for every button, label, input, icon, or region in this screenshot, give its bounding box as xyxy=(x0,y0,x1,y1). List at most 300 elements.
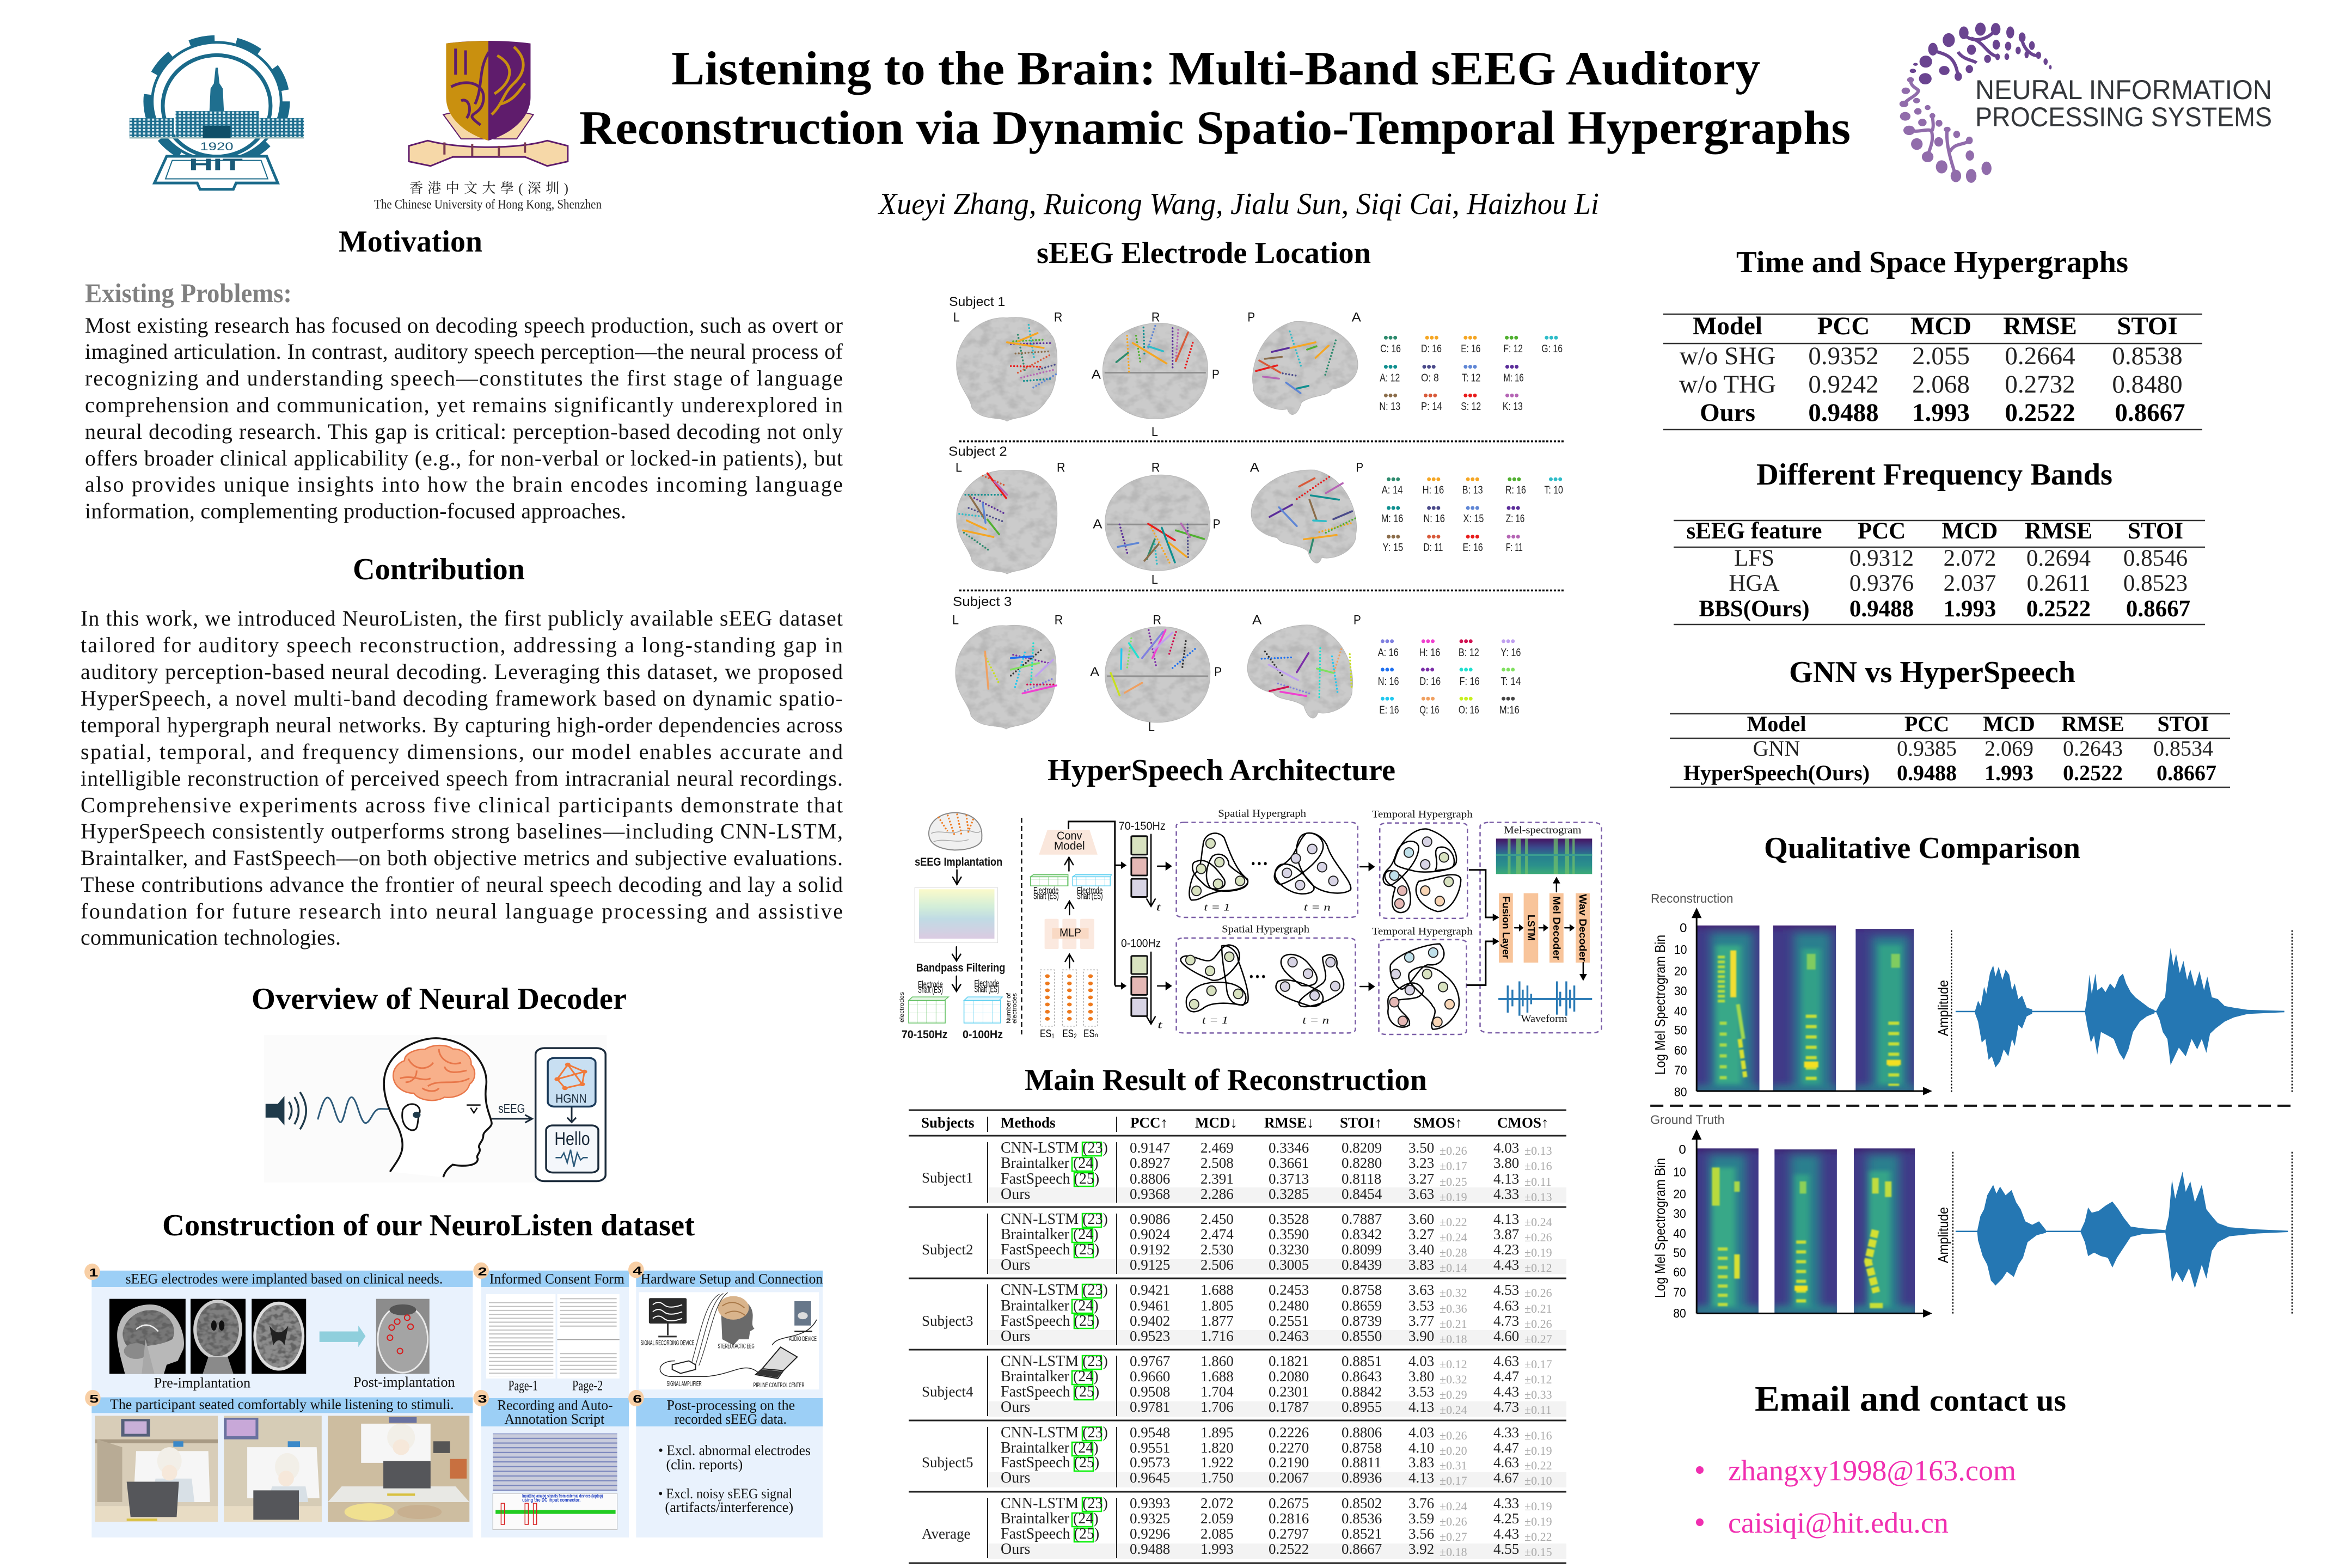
arrows xyxy=(1515,877,1587,981)
table: GNN vs HyperSpeech: STOI xyxy=(2158,712,2209,736)
legend: D: 16 xyxy=(1421,342,1442,355)
time axes: t xyxy=(1157,1019,1162,1031)
table: frequency bands xyxy=(1674,518,2205,624)
rows: Subject2: ±0.22 xyxy=(1440,1215,1467,1229)
rows: Subject1: ±0.16 xyxy=(1524,1159,1552,1173)
table: frequency bands: STOI xyxy=(2128,518,2183,544)
logo: The Chinese University of Hong Kong Shenzhen: 香港中文大學(深圳) xyxy=(409,181,568,196)
legend: Y: 15 xyxy=(1382,541,1403,554)
table header: Subjects xyxy=(921,1114,975,1131)
rows: Subject2: 3.40 xyxy=(1408,1241,1434,1258)
rows: Subject4: 0.2080 xyxy=(1269,1368,1309,1385)
text block: motivation body: also provides unique insights into how the brain encodes incoming language xyxy=(85,472,843,497)
rows: Average: 0.8502 xyxy=(1342,1495,1382,1511)
rows: Subject4: 0.9767 xyxy=(1130,1353,1170,1369)
table: GNN vs HyperSpeech: HyperSpeech(Ours) xyxy=(1683,761,1870,785)
panel: subject 2: Subject 2 xyxy=(948,444,1007,459)
label: sEEG arrow xyxy=(492,1101,532,1123)
rows: Subject5: FastSpeech (25) xyxy=(1001,1454,1099,1471)
rows: Average: ±0.19 xyxy=(1524,1499,1552,1513)
Hello block xyxy=(546,1125,598,1173)
rows: Average: 2.059 xyxy=(1200,1510,1234,1527)
rows: Average: 4.33 xyxy=(1493,1495,1519,1511)
panel: post-processing: Post-processing on the xyxy=(666,1398,795,1413)
icon: ear xyxy=(402,1104,420,1130)
figure: HyperSpeech architecture: Temporal Hypergraph xyxy=(1372,808,1473,820)
labels: rotated axis titles xyxy=(1652,935,1951,1298)
annotation trace: Inputting analog signals from external devices (laptop) xyxy=(522,1493,603,1499)
orientation labels: R xyxy=(1054,310,1062,324)
panel: recording script: Recording and Auto- xyxy=(497,1398,613,1413)
logo: The Chinese University of Hong Kong Shenzhen xyxy=(374,41,602,212)
rows: Subject5: ±0.19 xyxy=(1524,1444,1552,1457)
rows: Subject1: ±0.25 xyxy=(1440,1175,1467,1189)
panel: subject 3: Subject 3 xyxy=(953,595,1012,609)
rows: Subject2: 0.3590 xyxy=(1269,1226,1309,1242)
text block: contribution body: foundation for future research into neural language processing and assistive xyxy=(81,899,843,923)
rows: Subject1: Ours xyxy=(1001,1186,1030,1203)
table: time and space hypergraphs: 0.8667 xyxy=(2115,399,2185,427)
panel: hardware setup: SIGNAL RECORDING DEVICE xyxy=(641,1339,694,1346)
rows: Subject4: 1.704 xyxy=(1200,1383,1234,1400)
rows: Subject2: 0.9024 xyxy=(1130,1226,1171,1242)
rows: Subject2: ±0.12 xyxy=(1524,1261,1552,1275)
panel: post-processing: • Excl. abnormal electrodes xyxy=(658,1443,811,1458)
legend: C: 16 xyxy=(1380,342,1401,355)
rows: Average: ±0.22 xyxy=(1524,1530,1552,1543)
table: frequency bands: HGA xyxy=(1729,571,1780,596)
rows: Subject4: ±0.32 xyxy=(1440,1373,1467,1386)
icon: speaker xyxy=(266,1092,306,1129)
amplifier xyxy=(672,1361,696,1374)
legend: B: 13 xyxy=(1462,483,1483,496)
legend: T: 14 xyxy=(1500,675,1521,688)
spectrograms xyxy=(1690,1145,1920,1315)
table: time and space hypergraphs: w/o SHG xyxy=(1680,342,1775,370)
table: frequency bands: RMSE xyxy=(2025,518,2092,544)
text block: contribution body: tailored for auditory speech reconstruction, addressing a long-standing gap in xyxy=(81,633,843,657)
table: time and space hypergraphs: 0.2732 xyxy=(2005,370,2075,399)
rows: Subject2: 0.3005 xyxy=(1269,1257,1309,1273)
rows: Subject3: 3.90 xyxy=(1408,1328,1434,1344)
rows: Subject1: 0.3346 xyxy=(1269,1140,1309,1156)
rows: Subject5: ±0.22 xyxy=(1524,1459,1552,1472)
rows: Subject3: ±0.36 xyxy=(1440,1302,1467,1315)
brain view: top xyxy=(1105,475,1210,571)
rows: Subject2: 3.87 xyxy=(1493,1226,1519,1242)
rows: Subject3: ±0.26 xyxy=(1524,1286,1552,1300)
rows: Subject5: 4.33 xyxy=(1493,1424,1519,1441)
rows: Subject3: 0.8739 xyxy=(1342,1313,1382,1329)
orientation labels: L xyxy=(1152,572,1158,587)
decoder output: Waveform xyxy=(1521,1013,1567,1025)
orientation labels: L xyxy=(953,310,960,324)
table: frequency bands: MCD xyxy=(1942,518,1998,544)
table: time and space hypergraphs: 0.9352 xyxy=(1808,342,1879,370)
table: frequency bands: 0.8546 xyxy=(2123,546,2188,571)
logo: Harbin Institute of Technology xyxy=(130,40,304,189)
Conv model xyxy=(1039,829,1098,855)
electrode shaft grids xyxy=(1031,875,1112,901)
table: frequency bands: 0.2522 xyxy=(2026,596,2091,622)
rows: Average: 0.9296 xyxy=(1130,1526,1170,1542)
axis ticks: 0 xyxy=(1679,1142,1686,1156)
axis ticks: 70 xyxy=(1673,1285,1686,1300)
legend: N: 16 xyxy=(1378,675,1399,688)
table: frequency bands: PCC xyxy=(1858,518,1906,544)
legend: T: 10 xyxy=(1544,483,1563,496)
legend: B: 12 xyxy=(1459,646,1479,659)
step number badges: 6 xyxy=(633,1392,642,1406)
table: time and space hypergraphs: 0.8538 xyxy=(2112,342,2183,370)
rows: Average: 4.55 xyxy=(1493,1541,1519,1557)
table rules xyxy=(909,1110,1566,1563)
rows: Subject1: 0.9147 xyxy=(1130,1140,1170,1156)
table: GNN vs HyperSpeech: 0.9385 xyxy=(1897,736,1957,761)
orientation labels xyxy=(955,460,1363,587)
signal heatmap xyxy=(915,887,998,943)
rows: Subject2: 4.43 xyxy=(1493,1257,1519,1273)
rows: Average: 4.25 xyxy=(1493,1510,1519,1527)
annotation trace: using the DC input connector. xyxy=(522,1498,580,1503)
table: time and space hypergraphs: 0.9242 xyxy=(1808,370,1879,399)
hypergraph: spatial high band t=1: t = 1 xyxy=(1204,902,1230,913)
rows: Subject4 xyxy=(922,1353,1552,1417)
text block: contribution body: Braintalker, and FastSpeech—on both objective metrics and subjective evaluations. xyxy=(81,846,843,870)
rows: Subject1: 0.8209 xyxy=(1342,1140,1382,1156)
step number badges: 2 xyxy=(478,1265,487,1278)
brain view: top xyxy=(1105,627,1210,722)
rows: Subject1: 2.391 xyxy=(1200,1171,1234,1187)
time axes xyxy=(1147,835,1375,1031)
figure: HyperSpeech architecture: Shaft (ES) xyxy=(1077,891,1102,901)
table header: PCC↑ xyxy=(1130,1114,1168,1131)
orientation labels: A xyxy=(1352,310,1361,324)
photo 1 xyxy=(95,1416,218,1522)
rows: Subject5: 1.895 xyxy=(1200,1424,1234,1441)
rows: Subject1: ±0.17 xyxy=(1440,1159,1467,1173)
hypergraph: spatial high band t=n xyxy=(1275,833,1351,913)
rows: Subject4: ±0.12 xyxy=(1524,1373,1552,1386)
heading: Email and contact us: Email and contact us xyxy=(1755,1379,2066,1419)
panel: subject 1 xyxy=(949,295,1563,439)
rows: Subject2: 2.530 xyxy=(1200,1241,1234,1258)
rows: Subject4: 0.9781 xyxy=(1130,1399,1170,1415)
rows: Subject2: 3.27 xyxy=(1408,1226,1434,1242)
step number badges: 5 xyxy=(89,1392,99,1406)
rows: Subject5: 1.750 xyxy=(1200,1469,1234,1486)
rows: Subject3: 3.77 xyxy=(1408,1313,1434,1329)
axes xyxy=(1692,1129,1932,1318)
axis ticks: 30 xyxy=(1673,1206,1686,1221)
figure: HyperSpeech architecture xyxy=(902,807,1602,1041)
legend: F: 12 xyxy=(1504,342,1523,355)
table: GNN vs HyperSpeech: 0.8534 xyxy=(2153,736,2213,761)
panel: hardware setup xyxy=(636,1271,823,1398)
rows: Subject5: CNN-LSTM (23) xyxy=(1001,1424,1108,1441)
axis ticks: 80 xyxy=(1673,1306,1686,1320)
rows: Subject1: 3.50 xyxy=(1408,1140,1434,1156)
photo 2 xyxy=(224,1416,322,1522)
rows: Subject1: 2.469 xyxy=(1200,1140,1234,1156)
panel: informed consent: Page-1 xyxy=(509,1378,538,1393)
panel: post-processing: (artifacts/interference) xyxy=(665,1499,793,1515)
table: main results xyxy=(909,1110,1566,1563)
hypergraph: temporal high band xyxy=(1383,829,1461,912)
text block: contribution body: intelligible reconstruction of perceived speech from intracranial neural recordings. xyxy=(81,766,843,791)
rows: Subject1: Subject1 xyxy=(922,1169,973,1186)
waveform xyxy=(1498,981,1592,1016)
rows: Subject3: 4.60 xyxy=(1493,1328,1519,1344)
figure: HyperSpeech architecture: Electrode xyxy=(974,978,999,989)
rows: Subject1: FastSpeech (25) xyxy=(1001,1171,1099,1187)
table: GNN vs HyperSpeech: 0.2643 xyxy=(2063,736,2123,761)
rows: Subject5: Ours xyxy=(1001,1469,1030,1486)
rows: Subject4: 4.47 xyxy=(1493,1368,1519,1385)
rows: Subject5: Braintalker (24) xyxy=(1001,1440,1099,1456)
rows: Subject2: Subject2 xyxy=(922,1241,973,1258)
orientation labels: P xyxy=(1356,460,1363,475)
rows: Subject2: 0.9125 xyxy=(1130,1257,1170,1273)
rows: Subject4: 1.706 xyxy=(1200,1399,1234,1415)
text block: contribution body xyxy=(81,606,843,950)
feature stacks xyxy=(1131,836,1147,1016)
table header: Methods xyxy=(1001,1114,1055,1131)
labels: rotated block names: Fusion Layer xyxy=(1500,896,1511,959)
rows: Average: 3.92 xyxy=(1408,1541,1434,1557)
decoder output: Mel-spectrogram xyxy=(1504,824,1582,836)
legend: A: 16 xyxy=(1378,646,1399,659)
rows: Subject2: FastSpeech (25) xyxy=(1001,1241,1099,1258)
rows: Subject4: 0.2301 xyxy=(1269,1383,1309,1400)
rows: Subject3: 4.63 xyxy=(1493,1297,1519,1314)
rows: Subject4: 4.13 xyxy=(1408,1399,1434,1415)
rows: Subject5: ±0.20 xyxy=(1440,1444,1467,1457)
figure: qualitative comparison xyxy=(1650,892,2296,1320)
table: time and space hypergraphs: 0.2664 xyxy=(2005,342,2075,370)
heading: Contribution: Contribution xyxy=(353,553,525,586)
rows: Average: 3.56 xyxy=(1408,1526,1434,1542)
rows: Subject1: Braintalker (24) xyxy=(1001,1155,1099,1172)
rows: Subject2 xyxy=(922,1211,1552,1275)
rows: Average: ±0.19 xyxy=(1524,1515,1552,1528)
arrow xyxy=(320,1326,365,1347)
contact list: zhangxy1998@163.com xyxy=(1728,1454,2016,1487)
axis ticks: 10 xyxy=(1674,943,1687,957)
rows: Subject4: 0.9508 xyxy=(1130,1383,1170,1400)
labels: rotated axis titles: Amplitude xyxy=(1935,980,1951,1036)
rows: Subject5 xyxy=(922,1424,1552,1487)
figure: HyperSpeech architecture: 0-100Hz xyxy=(1121,936,1161,950)
rows: Subject1: 3.23 xyxy=(1408,1155,1434,1171)
rows: Subject4: 4.73 xyxy=(1493,1399,1519,1415)
table: frequency bands: 2.072 xyxy=(1944,546,1996,571)
rows: Subject2: ±0.28 xyxy=(1440,1246,1467,1259)
rows: Subject3: 3.63 xyxy=(1408,1282,1434,1298)
electrode shaft grids: Shaft (ES) xyxy=(1033,891,1058,901)
rows: Average: 0.2797 xyxy=(1269,1526,1309,1542)
orientation labels: A xyxy=(1093,517,1102,531)
logo: Harbin Institute of Technology: HIT xyxy=(189,155,243,174)
rows: Subject3: 4.53 xyxy=(1493,1282,1519,1298)
title: Reconstruction via Dynamic Spatio-Temporal Hypergraphs xyxy=(579,102,1851,155)
rows: Subject2: 0.8342 xyxy=(1342,1226,1382,1242)
HGNN block: HGNN xyxy=(555,1091,587,1105)
legend: T: 12 xyxy=(1462,371,1480,384)
rows: Subject4: ±0.12 xyxy=(1440,1357,1467,1371)
rows: Subject3: 1.716 xyxy=(1200,1328,1234,1344)
table header: SMOS↑ xyxy=(1413,1114,1462,1131)
orientation labels: R xyxy=(1152,310,1160,324)
authors: Xueyi Zhang, Ruicong Wang, Jialu Sun, Siqi Cai, Haizhou Li xyxy=(878,187,1599,221)
rows: Average: 0.2816 xyxy=(1269,1510,1309,1527)
rows: Subject4: ±0.11 xyxy=(1524,1403,1552,1417)
table: frequency bands: 0.2611 xyxy=(2027,571,2090,596)
orientation labels: R xyxy=(1152,460,1160,475)
rows: Subject5: ±0.17 xyxy=(1440,1474,1467,1487)
rows: Subject3: ±0.27 xyxy=(1524,1332,1552,1346)
icon: implanted brain xyxy=(929,812,982,850)
rows: Subject5: 0.2226 xyxy=(1269,1424,1309,1441)
feature extraction column xyxy=(1031,829,1112,1040)
axis ticks: 70 xyxy=(1674,1063,1687,1077)
rows: Subject2: 2.450 xyxy=(1200,1211,1234,1227)
legend: D: 16 xyxy=(1419,675,1441,688)
table: frequency bands: 0.9488 xyxy=(1849,596,1914,622)
rows: Subject3: FastSpeech (25) xyxy=(1001,1313,1099,1330)
rows: Subject3: Subject3 xyxy=(922,1313,973,1329)
axis ticks: 50 xyxy=(1674,1024,1687,1037)
axis ticks: 20 xyxy=(1673,1187,1686,1201)
rows: Subject3: Braintalker (24) xyxy=(1001,1297,1099,1314)
rows: Subject3: ±0.21 xyxy=(1440,1317,1467,1331)
legend xyxy=(1378,641,1521,716)
labels: rotated block names: Number of xyxy=(1006,993,1012,1024)
rows: Subject4: Braintalker (24) xyxy=(1001,1368,1099,1385)
rows: Subject4: 0.8643 xyxy=(1342,1368,1382,1385)
orientation labels: L xyxy=(952,612,959,627)
table: time and space hypergraphs xyxy=(1663,312,2202,430)
table: frequency bands: BBS(Ours) xyxy=(1699,596,1810,622)
text block: motivation body: neural decoding research. This gap is critical: perception-based decoding not only xyxy=(85,419,843,444)
axis ticks: 20 xyxy=(1674,964,1687,978)
rows: Subject3: 0.9421 xyxy=(1130,1282,1170,1298)
text block: contribution body: HyperSpeech, a novel multi-band decoding framework based on dynamic spatio- xyxy=(81,686,843,710)
rows: Subject3: 1.877 xyxy=(1200,1313,1234,1329)
icon: brain xyxy=(393,1045,475,1100)
text block: contribution body: auditory perception-based neural decoding. Leveraging this dataset, we proposed xyxy=(81,659,843,684)
preprocessing column: Shaft (ES) xyxy=(918,985,943,995)
rows: Subject5: 4.67 xyxy=(1493,1469,1519,1486)
preprocessing column xyxy=(902,812,1005,1041)
heading: Time and Space Hypergraphs: Time and Space Hypergraphs xyxy=(1736,246,2128,279)
electrode shaft columns: ES₂ xyxy=(1062,1028,1077,1040)
legend: Y: 16 xyxy=(1500,646,1521,659)
rows: Subject5: 0.9551 xyxy=(1130,1440,1170,1456)
rows: Subject1: CNN-LSTM (23) xyxy=(1001,1140,1108,1156)
time axes: t xyxy=(1156,902,1161,913)
legend: E: 16 xyxy=(1379,704,1399,716)
rows: Subject5: ±0.26 xyxy=(1440,1429,1467,1442)
rows: Average: 2.072 xyxy=(1200,1495,1234,1511)
panel: participant photos xyxy=(91,1396,473,1538)
panel: hardware setup: AUDIO DEVICE xyxy=(789,1335,817,1342)
branch connector xyxy=(1069,822,1126,990)
labels: rotated block names: electrodes xyxy=(899,991,905,1022)
orientation labels: R xyxy=(1055,612,1063,627)
brain view: top xyxy=(1102,323,1208,419)
hypergraph: spatial high band t=n: t = n xyxy=(1304,902,1331,913)
axis ticks xyxy=(1673,1142,1686,1320)
rows: Subject4: Subject4 xyxy=(922,1383,973,1400)
text block: contribution body: spatial, temporal, and frequency dimensions, our model enables accurate and xyxy=(81,739,843,764)
orientation labels: A xyxy=(1092,367,1101,382)
rows: Average: Braintalker (24) xyxy=(1001,1510,1099,1527)
rows: Subject2: 0.3230 xyxy=(1269,1241,1309,1258)
panel: post-processing: (clin. reports) xyxy=(666,1457,743,1472)
labels: rotated axis titles: Log Mel Spectrogram Bin xyxy=(1652,935,1668,1075)
rows: Subject2: 3.60 xyxy=(1408,1211,1434,1227)
table: time and space hypergraphs: w/o THG xyxy=(1679,370,1776,399)
table: GNN vs HyperSpeech xyxy=(1670,712,2230,787)
legend: E: 16 xyxy=(1461,342,1480,355)
text block: motivation body: comprehension and communication, yet remains significantly underexplored in xyxy=(85,393,843,417)
axis ticks: 10 xyxy=(1673,1165,1686,1179)
rows: Subject4: 4.43 xyxy=(1493,1383,1519,1400)
ours highlight rows xyxy=(988,1187,1566,1559)
rows: Subject3 xyxy=(922,1282,1552,1346)
table header: CMOS↑ xyxy=(1497,1114,1548,1131)
legend: Z: 16 xyxy=(1506,512,1524,525)
electrode shaft columns: ES₁ xyxy=(1040,1028,1055,1040)
rows: Subject1: ±0.13 xyxy=(1524,1190,1552,1204)
label: sEEG arrow: sEEG xyxy=(498,1101,525,1116)
rows: Subject1: ±0.26 xyxy=(1440,1144,1467,1157)
rows: Subject2: ±0.24 xyxy=(1524,1215,1552,1229)
text block: contribution body: Comprehensive experiments across five clinical participants demonstrate that xyxy=(81,793,843,817)
orientation labels xyxy=(953,310,1361,439)
table: time and space hypergraphs: 2.055 xyxy=(1912,342,1970,370)
text block: contribution body: temporal hypergraph neural networks. By capturing high-order dependencies across xyxy=(81,713,843,737)
panel: subject 2 xyxy=(948,444,1563,587)
orientation labels: P xyxy=(1247,310,1255,324)
table: frequency bands: sEEG feature xyxy=(1687,518,1822,544)
rows: Subject5: 4.63 xyxy=(1493,1454,1519,1471)
legend: K: 13 xyxy=(1503,400,1523,413)
orientation labels: P xyxy=(1212,367,1220,382)
rows: Subject3: 0.2453 xyxy=(1269,1282,1309,1298)
rows: Subject5: 0.8936 xyxy=(1342,1469,1382,1486)
panel: electrode implantation xyxy=(91,1271,473,1398)
rows: Subject4: 4.63 xyxy=(1493,1353,1519,1369)
rows: Subject3: ±0.32 xyxy=(1440,1286,1467,1300)
MLP: MLP xyxy=(1059,926,1081,939)
electrode grid: high band xyxy=(909,997,948,1023)
waveform xyxy=(1956,1172,2288,1288)
electrode grid: low band xyxy=(964,997,1002,1023)
table header: RMSE↓ xyxy=(1264,1114,1314,1131)
legend: E: 16 xyxy=(1463,541,1483,554)
rows: Average: ±0.18 xyxy=(1440,1545,1467,1559)
contact list: caisiqi@hit.edu.cn xyxy=(1728,1506,1949,1539)
rows: Subject1: 4.13 xyxy=(1493,1171,1519,1187)
rows: Subject4: 0.8955 xyxy=(1342,1399,1382,1415)
orientation labels: P xyxy=(1214,665,1222,679)
labels: rotated block names: Wav Decoder xyxy=(1577,894,1588,961)
orientation labels: A xyxy=(1250,460,1259,475)
panel: hardware setup: SIGNAL AMPLIFIER xyxy=(666,1380,702,1387)
figure: HyperSpeech architecture: sEEG Implantation xyxy=(915,855,1002,868)
